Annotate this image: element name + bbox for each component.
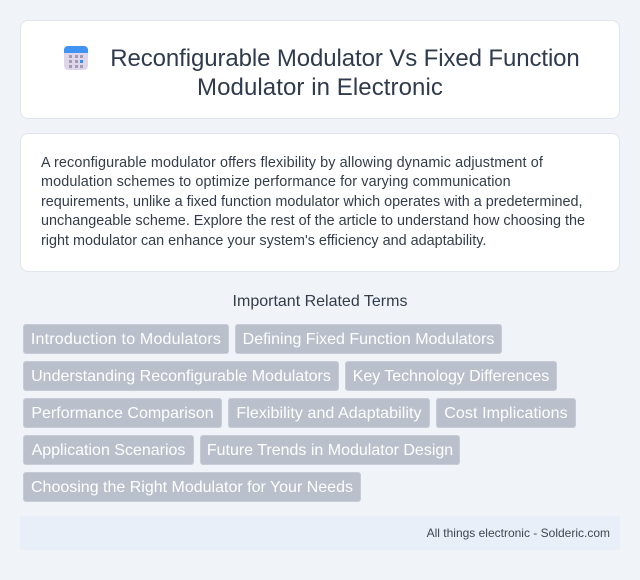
tag [200,435,460,465]
tag: Understanding Reconfigurable Modulators [31,368,331,385]
tag: Introduction to Modulators [31,331,221,348]
tag: Cost Implications [444,405,568,422]
tag list [23,324,576,502]
tag: Flexibility and Adaptability [236,405,422,422]
tag: Application Scenarios [32,442,185,459]
tag [23,361,339,391]
title line 1: Reconfigurable Modulator Vs Fixed Function [110,45,580,72]
footer bar [20,516,620,550]
description text: unchangeable scheme. Explore the rest of the article to understand how choosing the [41,213,585,229]
description text: A reconfigurable modulator offers flexibility by allowing dynamic adjustment of [41,155,543,171]
title line 2: Modulator in Electronic [197,74,443,101]
tag: Defining Fixed Function Modulators [243,331,494,348]
tag: Future Trends in Modulator Design [207,442,453,459]
description text [41,155,585,249]
tag [23,472,361,502]
tag: Key Technology Differences [353,368,549,385]
tag [23,435,194,465]
panel: description card [20,133,620,272]
tag [436,398,576,428]
icon: calendar grid [64,46,88,70]
tag [23,398,222,428]
tag [235,324,502,354]
tag [345,361,557,391]
heading: important related terms: Important Related Terms [233,293,407,310]
tag [23,324,229,354]
description text: right modulator can enhance your system's efficiency and adaptability. [41,233,486,249]
tag [228,398,430,428]
description text: requirements, unlike a fixed function modulator which operates with a predetermined, [41,194,583,210]
description text: modulation schemes to optimize performance for varying communication [41,174,511,190]
tag: Performance Comparison [31,405,214,422]
panel: title card [20,20,620,119]
footer bar: All things electronic - Solderic.com [427,526,610,540]
tag: Choosing the Right Modulator for Your Needs [31,479,353,496]
